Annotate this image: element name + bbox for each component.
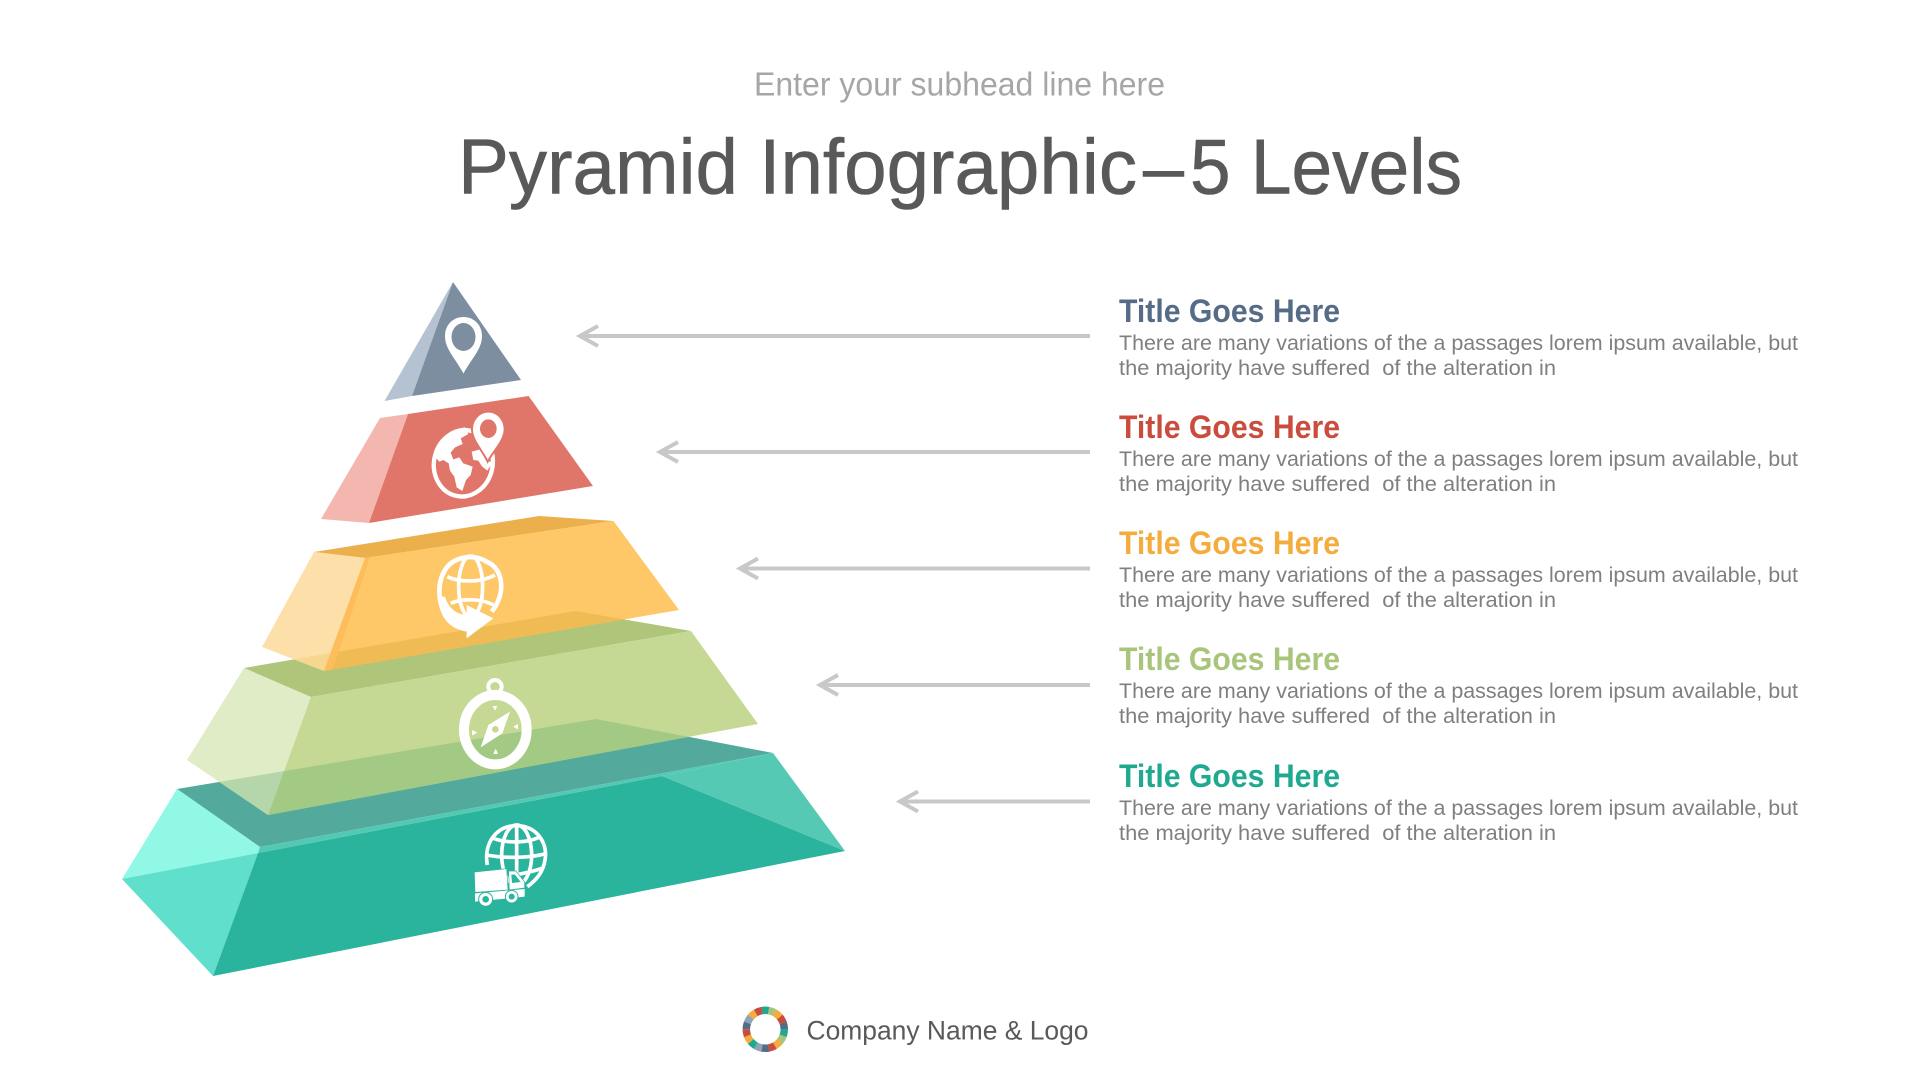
icon: globe with arrow xyxy=(439,556,501,638)
icon: map pin xyxy=(445,317,482,374)
company logo xyxy=(739,1003,792,1056)
company name: Company Name & Logo xyxy=(806,1016,1088,1046)
level 2 green xyxy=(187,620,758,815)
title xyxy=(458,122,1462,210)
text block 2: There are many variations of the a passages lorem ipsum available, but xyxy=(1119,448,1798,471)
level 5 slate xyxy=(384,282,521,401)
text block 2 xyxy=(1119,409,1798,496)
text block 1: There are many variations of the a passages lorem ipsum available, but xyxy=(1119,332,1798,355)
text block 4: There are many variations of the a passages lorem ipsum available, but xyxy=(1119,680,1798,703)
title: 5 Levels xyxy=(1190,122,1462,210)
text block 4 xyxy=(1119,641,1798,728)
arrow 4 xyxy=(820,675,1090,695)
text block 3: the majority have suffered of the alteration in xyxy=(1119,589,1556,612)
arrow 2 xyxy=(660,442,1090,462)
text block 5: the majority have suffered of the alteration in xyxy=(1119,822,1556,845)
text block 3: Title Goes Here xyxy=(1119,525,1340,561)
text block 2: the majority have suffered of the alteration in xyxy=(1119,473,1556,496)
text block 4: the majority have suffered of the alteration in xyxy=(1119,705,1556,728)
icon: globe with pin xyxy=(428,412,505,502)
text block 1: the majority have suffered of the alteration in xyxy=(1119,357,1556,380)
title: Pyramid Infographic xyxy=(458,122,1137,210)
level 1 teal base xyxy=(122,719,845,976)
arrow 5 xyxy=(900,792,1090,812)
title: – xyxy=(1143,122,1185,210)
pyramid xyxy=(122,282,845,976)
icon: compass xyxy=(464,680,527,764)
text block 3 xyxy=(1119,525,1798,612)
arrow 1 xyxy=(580,326,1090,346)
text block 5: Title Goes Here xyxy=(1119,758,1340,794)
text block 3: There are many variations of the a passages lorem ipsum available, but xyxy=(1119,564,1798,587)
subhead: Enter your subhead line here xyxy=(754,66,1165,102)
level 3 orange xyxy=(262,516,679,671)
level 4 red xyxy=(321,396,593,523)
text block 1: Title Goes Here xyxy=(1119,293,1340,329)
text block 5: There are many variations of the a passages lorem ipsum available, but xyxy=(1119,797,1798,820)
arrow 3 xyxy=(740,558,1090,578)
text block 4: Title Goes Here xyxy=(1119,641,1340,677)
infographic slide xyxy=(122,72,1798,1052)
text block 5 xyxy=(1119,758,1798,845)
text block 2: Title Goes Here xyxy=(1119,409,1340,445)
icon: globe with truck xyxy=(474,825,547,906)
text block 1 xyxy=(1119,293,1798,380)
